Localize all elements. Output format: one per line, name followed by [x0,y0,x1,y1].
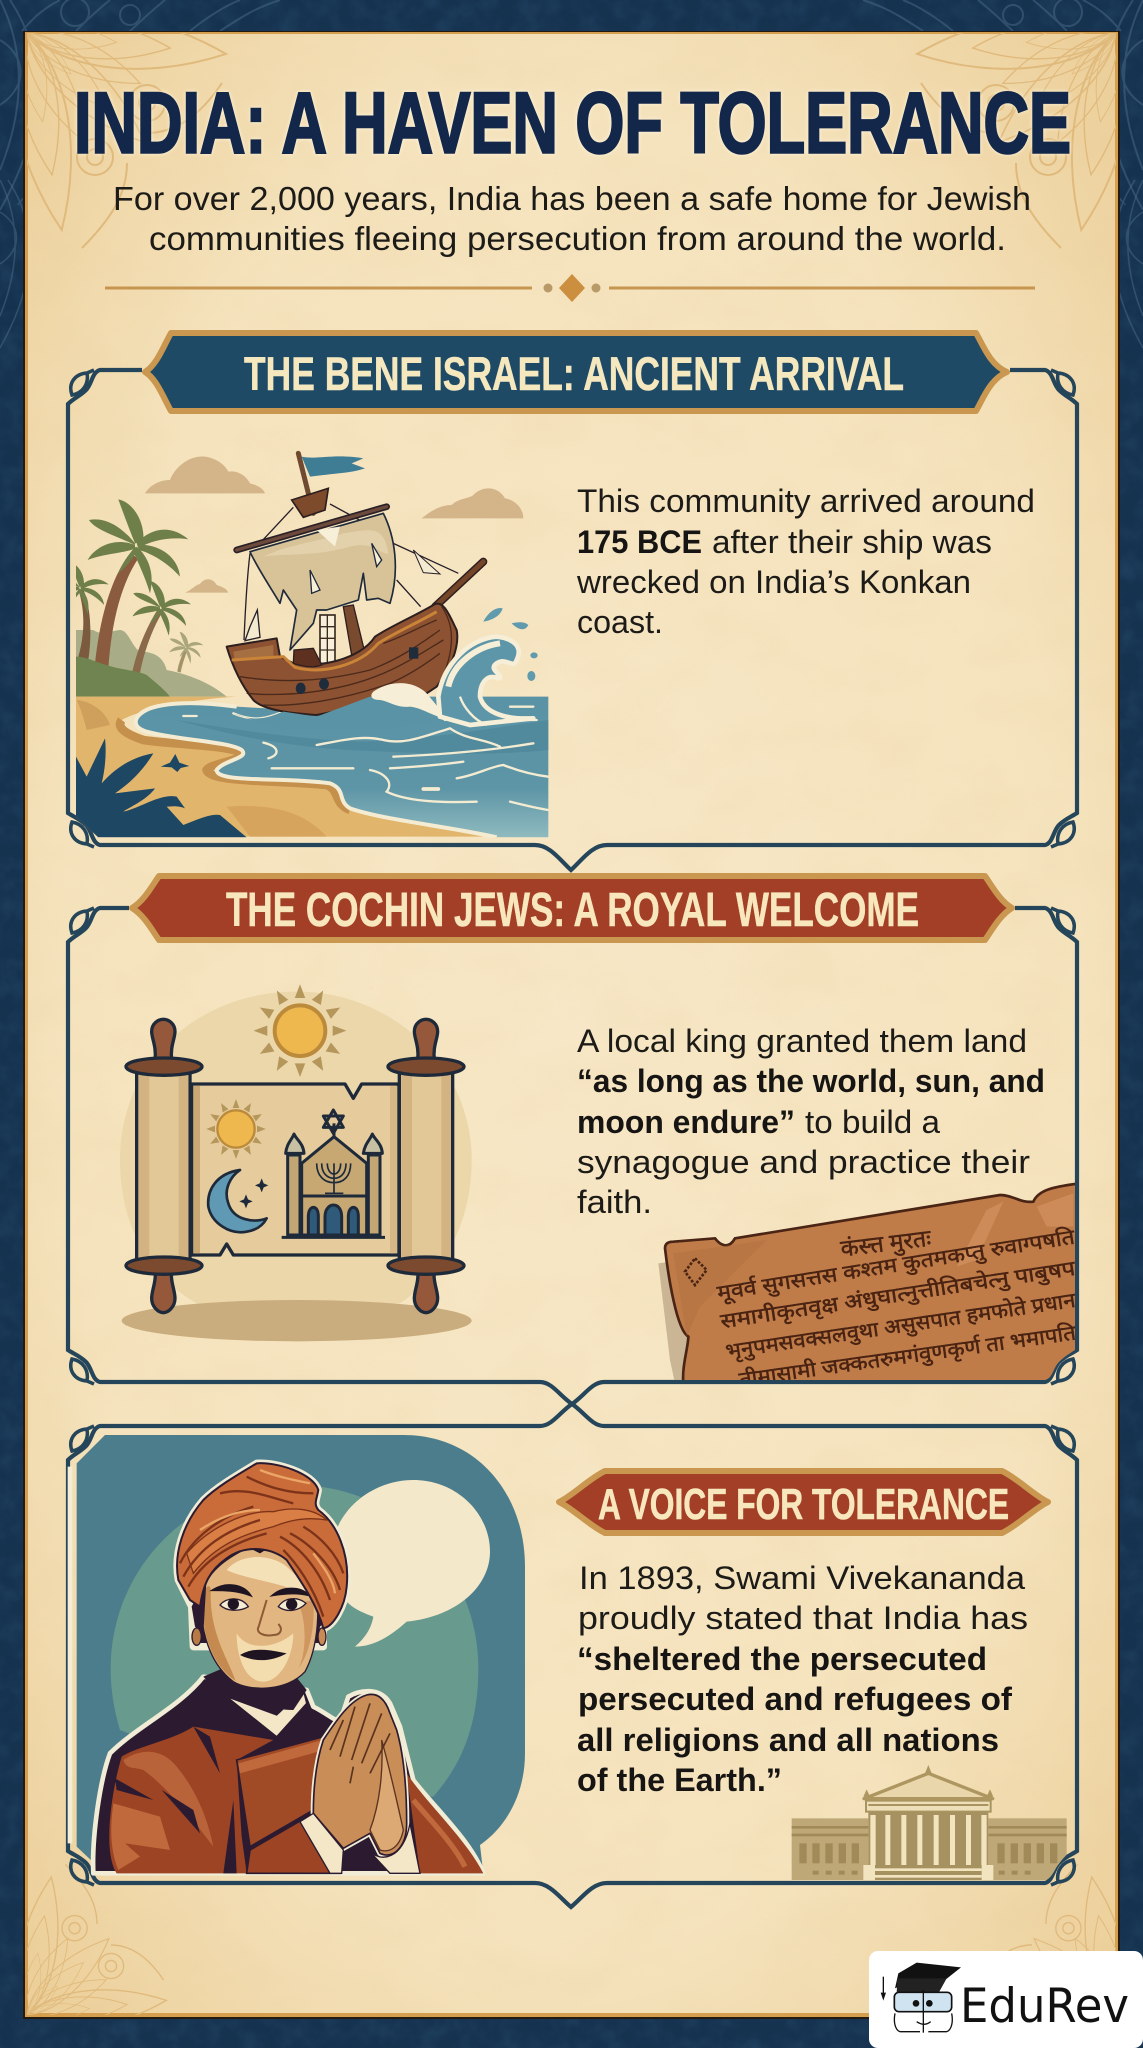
body text: Vivekananda quote: all religions and all nations [577,1722,999,1758]
illustration: Swami Vivekananda portrait [70,1435,525,1873]
body text: Bene Israel: wrecked on India’s Konkan [576,564,971,600]
inscription in Devanagari [716,1226,1075,1380]
icon: mascot with graduation cap [881,1963,961,2033]
icon: crescent moon and stars [208,1170,268,1232]
portrait turban [177,1463,347,1628]
body text: Bene Israel: 175 BCE [577,524,702,560]
inscription in Devanagari: कंस्त्त मुरतः [839,1225,934,1267]
inscription in Devanagari: समागीकृतवृक्ष अंधुघात्नुत्तीतिबचेत्नु पाबुषप [719,1256,1079,1337]
banner: Cochin Jews heading [132,876,1012,940]
body text: Cochin Jews: to build a [805,1104,941,1140]
body text: Bene Israel: coast. [577,604,663,640]
panel frames with interlaced knot [68,370,1077,1907]
banner: Bene Israel heading: THE BENE ISRAEL: ANCIENT ARRIVAL [244,347,904,400]
subtitle [113,180,1031,257]
icon: left scroll roller [126,1019,202,1313]
illustration: copper plate grant [658,1183,1080,1396]
body text: Vivekananda quote: In 1893, Swami Vivekananda [579,1560,1026,1596]
banner: A Voice for Tolerance heading [559,1471,1048,1533]
body text: Vivekananda quote: “sheltered the persecuted [577,1641,987,1677]
subtitle: communities fleeing persecution from around the world. [149,220,1006,257]
icon: right scroll roller [388,1019,464,1313]
body text: Cochin Jews [577,1023,1045,1220]
body text: Cochin Jews: faith. [577,1184,652,1220]
icon: synagogue with menorah and star of David [282,1110,385,1237]
icon: large sun [254,984,346,1077]
body text: Vivekananda quote [577,1560,1028,1798]
body text: Vivekananda quote: persecuted and refugees of [578,1681,1012,1717]
body text: Bene Israel: This community arrived around [577,483,1035,519]
body text: Vivekananda quote: proudly stated that India has [578,1600,1028,1636]
body text: Vivekananda quote: of the Earth.” [577,1762,782,1798]
illustration: Torah scroll with sun, moon and synagogue [120,984,472,1341]
body text: Cochin Jews: A local king granted them land [577,1023,1027,1059]
body text: Cochin Jews: moon endure” [577,1104,795,1140]
panel: Cochin Jews [120,876,1080,1396]
icon: small sun [206,1099,266,1159]
banner: Bene Israel heading [145,333,1007,411]
illustration: shipwreck on the Konkan coast [53,453,548,837]
EduRev logo: EduRev [960,1979,1129,2034]
body text: Cochin Jews: “as long as the world, sun, and [577,1063,1045,1099]
body text: Bene Israel [576,483,1035,640]
inscription in Devanagari: मूवर्व सुगसत्तस कश्तम कुतमकप्तु रुवाग्पषति [715,1224,1078,1309]
ornamental divider [105,274,1035,302]
panel: Bene Israel [53,333,1035,837]
subtitle: For over 2,000 years, India has been a safe home for Jewish [113,180,1031,217]
icon: speech bubble [335,1480,490,1647]
portrait praying hands [300,1694,420,1873]
body text: Cochin Jews: synagogue and practice their [577,1144,1030,1180]
illustration: Parliament of Religions building [792,1765,1067,1880]
body text: Bene Israel: after their ship was [712,524,992,560]
EduRev logo [869,1951,1143,2048]
panel: A Voice for Tolerance [70,1435,1067,1880]
inscription in Devanagari: भृनुपमसवक्सलवुथा असुसपात हमफोते प्रधान [724,1288,1078,1367]
portrait face [192,1545,318,1688]
inscription in Devanagari: तीमासामी जक्कतरुमगंवुणकृर्ण ता भमापति [737,1320,1079,1396]
